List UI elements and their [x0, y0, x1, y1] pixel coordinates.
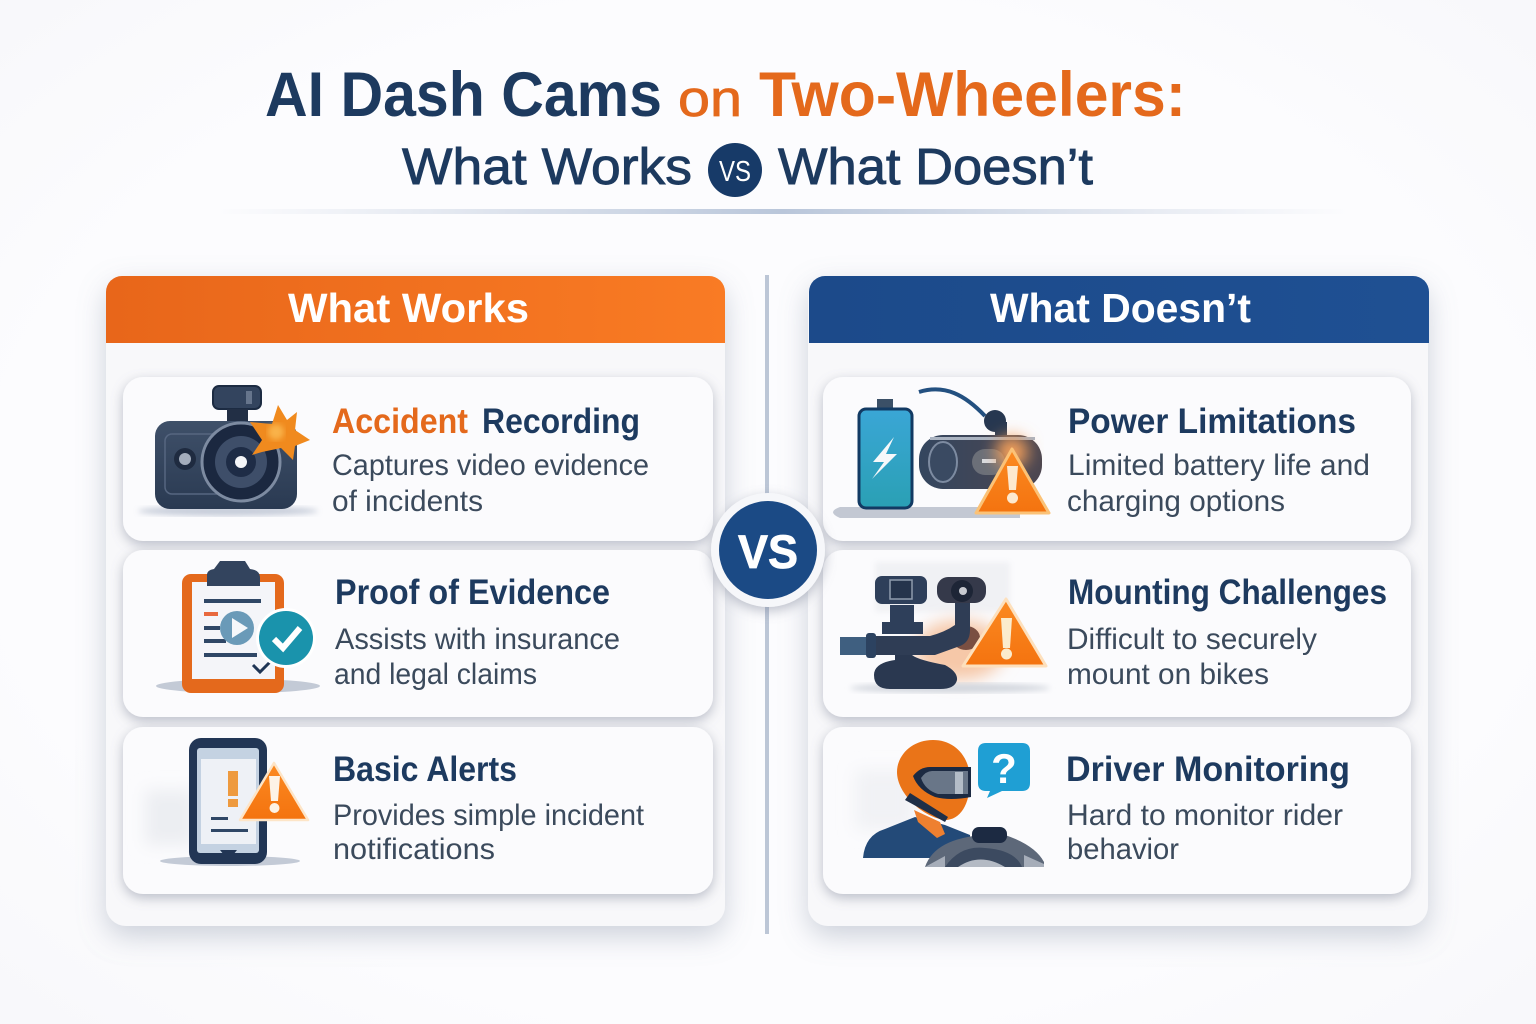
title: Two-Wheelers: [759, 60, 1186, 130]
title: on [678, 70, 742, 127]
card: power limitations [823, 377, 1411, 541]
icon: dash camera with flash [138, 386, 318, 516]
description [1067, 799, 1343, 866]
description [333, 799, 645, 866]
subtitle: VS [719, 156, 751, 188]
description: Captures video evidence [332, 449, 649, 482]
description [1067, 623, 1317, 691]
description [1067, 449, 1370, 518]
header: what doesn't: What Doesn’t [990, 285, 1251, 331]
description: Hard to monitor rider [1067, 799, 1343, 832]
description [332, 449, 649, 518]
description: Assists with insurance [335, 623, 620, 656]
heading: Basic Alerts [333, 750, 517, 789]
card: proof of evidence [123, 550, 713, 717]
subtitle: What Doesn’t [778, 138, 1093, 195]
description: mount on bikes [1067, 658, 1269, 691]
icon: rider with question bubble: ? [991, 745, 1017, 792]
icon: clipboard with check [156, 561, 320, 693]
heading: Mounting Challenges [1068, 573, 1387, 612]
icon: rider with question bubble [855, 740, 1044, 867]
description: Difficult to securely [1067, 623, 1317, 656]
panel: what works [106, 276, 725, 926]
header: what works: What Works [288, 285, 529, 331]
subtitle: What Works [402, 138, 692, 195]
card: mounting challenges [823, 550, 1411, 717]
heading: Proof of Evidence [335, 573, 610, 612]
description: Limited battery life and [1068, 449, 1370, 482]
heading: Accident [332, 402, 468, 441]
description: Provides simple incident [333, 799, 645, 832]
title: AI Dash Cams [265, 60, 662, 130]
header: what doesn't [809, 276, 1429, 343]
icon: handlebar mount with warning [840, 562, 1050, 693]
vs badge: VS [738, 525, 798, 578]
heading: Driver Monitoring [1066, 750, 1350, 789]
description: and legal claims [334, 658, 537, 691]
description [334, 623, 620, 691]
description: charging options [1067, 485, 1285, 518]
card: basic alerts [123, 727, 713, 894]
description: of incidents [332, 485, 483, 518]
panel: what doesn't [808, 276, 1429, 926]
card: accident recording [123, 377, 713, 541]
heading [332, 402, 640, 441]
heading: Power Limitations [1068, 402, 1356, 441]
title [265, 60, 1186, 130]
vs badge [711, 493, 825, 607]
heading: Recording [482, 402, 640, 441]
icon: phone with warning [145, 738, 308, 866]
header: what works [106, 276, 725, 343]
subtitle [402, 138, 1093, 197]
description: behavior [1067, 833, 1179, 866]
card: driver monitoring [823, 727, 1411, 894]
description: notifications [333, 833, 495, 866]
icon: battery and camera with warning [833, 389, 1049, 518]
